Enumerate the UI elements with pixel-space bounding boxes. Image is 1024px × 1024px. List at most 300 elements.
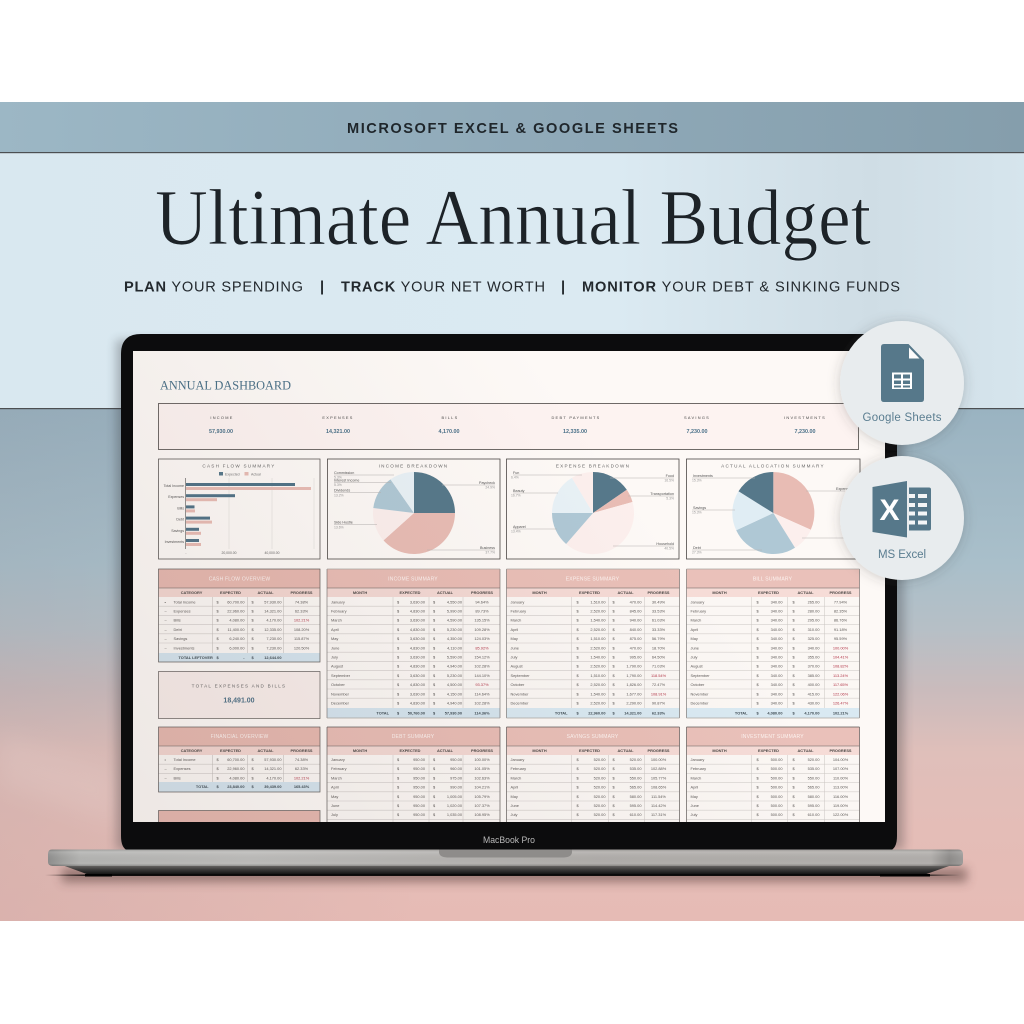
- table: financial overview: 165.43%: [294, 784, 310, 789]
- chart: income breakdown: [328, 459, 500, 559]
- table: investment summary: 110.00%: [833, 775, 849, 780]
- table: debt summary: May: [331, 794, 338, 799]
- table: bill summary: 340.00: [771, 636, 783, 641]
- table: debt summary: 108.95%: [474, 812, 490, 817]
- table: bill summary: February: [690, 608, 706, 614]
- table: investment summary: May: [690, 794, 698, 799]
- table: expense summary: 875.00: [630, 636, 642, 641]
- KPI strip: INVESTMENTS: [784, 415, 826, 420]
- table: debt summary: 950.00: [413, 757, 426, 762]
- table: bill summary: $: [756, 710, 760, 716]
- chart: expense breakdown: EXPENSE BREAKDOWN: [556, 464, 630, 468]
- table: cash flow overview: $: [216, 618, 220, 623]
- table: investment summary: 119.00%: [833, 803, 849, 808]
- pie labels: 27.3%: [692, 550, 702, 554]
- table: bill summary: 100.00%: [833, 645, 849, 650]
- table: investment summary: $: [792, 757, 796, 762]
- table: expense summary: $: [612, 691, 616, 696]
- table: expense summary: 64.50%: [652, 654, 666, 660]
- table: income summary: 4,830.00: [410, 682, 426, 687]
- table: cash flow overview: $: [252, 627, 254, 632]
- table: income summary: 4,830.00: [410, 627, 426, 632]
- table: savings summary: February: [510, 766, 526, 771]
- table: income summary: September: [331, 673, 351, 678]
- table: income summary: August: [331, 664, 344, 669]
- table: bill summary: 91.18%: [834, 627, 848, 632]
- pie labels: 37.7%: [485, 550, 495, 554]
- table: income summary: 4,830.00: [410, 645, 426, 650]
- subtitle divider 2: |: [561, 280, 565, 296]
- table: bill summary: 95.59%: [834, 636, 848, 641]
- table: bill summary: 108.82%: [833, 664, 849, 669]
- table: bill summary: $: [792, 664, 796, 669]
- KPI strip: 4,170.00: [439, 429, 459, 435]
- banner text: MICROSOFT EXCEL & GOOGLE SHEETS: [347, 121, 678, 137]
- table: expense summary: November: [510, 691, 529, 696]
- table: debt summary: $: [433, 812, 436, 817]
- table: investment summary: PROGRESS: [829, 748, 852, 753]
- table: debt summary: $: [433, 803, 436, 808]
- table: bill summary: EXPECTED: [758, 590, 779, 595]
- table: investment summary: 104.00%: [833, 757, 849, 762]
- table: expense summary: 1,510.00: [590, 636, 606, 641]
- pie labels: 5.3%: [334, 476, 342, 480]
- table: cash flow overview: 6,240.00: [229, 636, 245, 641]
- table: financial overview: 39,439.00: [264, 784, 282, 789]
- legend: [219, 472, 261, 476]
- table: bill summary: $: [756, 599, 760, 604]
- table: cash flow overview: •: [164, 599, 166, 604]
- table: bill summary: $: [792, 608, 796, 614]
- table: debt summary: 100.00%: [474, 757, 490, 762]
- table: debt summary: 105.79%: [474, 794, 490, 799]
- table: expense summary: $: [576, 673, 580, 678]
- table: financial overview: TOTAL: [196, 784, 209, 789]
- table: cash flow overview: $: [216, 599, 220, 604]
- table: savings summary: July: [510, 812, 517, 817]
- pie labels: 15.3%: [692, 510, 702, 514]
- table: income summary: 4,550.00: [447, 599, 463, 604]
- table: savings summary: 108.65%: [651, 785, 667, 790]
- table: expense summary: $: [576, 627, 580, 632]
- table: debt summary: 1,005.00: [447, 794, 463, 799]
- table: savings summary: 595.00: [630, 803, 642, 808]
- table: income summary: July: [331, 654, 338, 660]
- subtitle: track: TRACK YOUR NET WORTH: [341, 280, 545, 296]
- pie labels: [334, 471, 495, 554]
- table: bill summary: 77.94%: [834, 599, 848, 604]
- table: savings summary: 114.42%: [651, 803, 667, 808]
- table: cash flow overview: Expenses: [174, 608, 191, 614]
- table: investment summary: $: [792, 812, 796, 817]
- chart: expense breakdown: [506, 459, 679, 559]
- table: expense summary: TOTAL: [555, 710, 568, 716]
- table: savings summary: 550.00: [630, 775, 642, 780]
- table: financial overview: 14,321.00: [264, 766, 282, 771]
- KPI strip: 14,321.00: [326, 429, 350, 435]
- table: financial overview: $: [252, 757, 254, 762]
- table: cash flow overview: $: [216, 655, 220, 660]
- table: income summary: 114.36%: [474, 710, 490, 716]
- table: cash flow overview: ACTUAL: [258, 590, 274, 595]
- table: bill summary: 340.00: [771, 608, 783, 614]
- table: income summary: 4,110.00: [447, 645, 463, 650]
- table: income summary: 5,230.00: [447, 673, 463, 678]
- table: investment summary: $: [756, 803, 760, 808]
- pie labels: Side Hustle: [334, 520, 353, 524]
- table: income summary: PROGRESS: [471, 590, 493, 595]
- table: financial overview: Total Income: [174, 757, 196, 762]
- table: expense summary: February: [510, 608, 526, 614]
- table: investment summary: 500.00: [771, 803, 783, 808]
- pie labels: 15.3%: [692, 478, 702, 482]
- table: income summary: 4,940.00: [447, 664, 463, 669]
- table: expense summary: $: [576, 599, 580, 604]
- table: income summary: 93.37%: [475, 682, 489, 687]
- table: savings summary: 610.00: [630, 812, 642, 817]
- table: income summary: $: [397, 654, 400, 660]
- chart: cash flow summary: CASH FLOW SUMMARY: [202, 464, 276, 468]
- table: financial overview: 57,930.00: [264, 757, 282, 762]
- table: income summary: $: [433, 599, 436, 604]
- table: cash flow overview: $: [252, 618, 254, 623]
- table: income summary: 102.28%: [474, 664, 490, 669]
- table: debt summary: $: [397, 794, 400, 799]
- icon: excel: X: [879, 494, 900, 527]
- table: expense summary: 1,677.00: [626, 691, 642, 696]
- table: income summary: $: [397, 599, 400, 604]
- KPI strip: EXPENSES: [322, 415, 354, 420]
- card: total expenses and bills: 18,491.00: [223, 698, 255, 704]
- table: debt summary: $: [397, 766, 400, 771]
- table: income summary: 4,150.00: [447, 691, 463, 696]
- table: debt summary: January: [331, 757, 345, 762]
- table: financial overview: EXPECTED: [220, 748, 241, 753]
- table: cash flow overview: -: [243, 655, 245, 660]
- table: expense summary: 61.03%: [652, 618, 666, 623]
- table: bill summary: $: [756, 664, 760, 669]
- table: cash flow overview: 74.38%: [295, 599, 309, 604]
- table: expense summary: 14,321.00: [624, 710, 642, 716]
- table: investment summary: 565.00: [808, 785, 820, 790]
- table: investment summary: 595.00: [808, 803, 820, 808]
- table: debt summary: 1,020.00: [447, 803, 463, 808]
- title: Ultimate Annual Budget: [155, 175, 871, 262]
- table: bill summary: $: [756, 608, 760, 614]
- table: bill summary: 340.00: [771, 673, 783, 678]
- table: debt summary: 950.00: [413, 766, 426, 771]
- table: savings summary: $: [576, 757, 580, 762]
- table: expense summary: MONTH: [532, 590, 547, 595]
- table: bill summary: 4,080.00: [767, 710, 782, 716]
- table: investment summary: $: [792, 766, 796, 771]
- table: savings summary: $: [612, 785, 616, 790]
- table: bill summary: $: [792, 627, 796, 632]
- table: income summary: $: [397, 682, 400, 687]
- table: investment summary: July: [690, 812, 697, 817]
- table: bill summary: 86.76%: [834, 618, 848, 623]
- table: income summary: 4,350.00: [447, 636, 463, 641]
- table: expense summary: $: [576, 645, 580, 650]
- table: investment summary: $: [756, 766, 760, 771]
- table: savings summary: $: [576, 812, 580, 817]
- table: debt summary: 104.21%: [474, 785, 490, 790]
- table: expense summary: $: [576, 700, 580, 706]
- laptop screen: [133, 351, 885, 830]
- table: savings summary: $: [612, 794, 616, 799]
- trackpad notch: [439, 850, 572, 858]
- pie labels: 40.5%: [664, 546, 674, 550]
- table: cash flow overview: –: [164, 636, 168, 641]
- table: expense summary: EXPECTED: [579, 590, 600, 595]
- table: bill summary: April: [690, 627, 698, 632]
- light blue header area: [0, 153, 1024, 408]
- table: next panel header (cut off): [158, 810, 320, 822]
- table: income summary: 4,500.00: [447, 682, 463, 687]
- table: savings summary: PROGRESS: [647, 748, 670, 753]
- table: savings summary: $: [612, 757, 616, 762]
- table: income summary: 94.64%: [475, 599, 489, 604]
- table: cash flow overview: $: [216, 645, 220, 650]
- table: financial overview: 23,840.00: [227, 784, 244, 789]
- table: income summary: 3,630.00: [410, 599, 426, 604]
- table: income summary: 5,230.00: [447, 627, 463, 632]
- table: financial overview: $: [252, 766, 254, 771]
- table: expense summary: 33.33%: [652, 627, 666, 632]
- table: bill summary: October: [690, 682, 705, 687]
- table: investment summary: February: [690, 766, 706, 771]
- table: debt summary: EXPECTED: [400, 748, 421, 753]
- table: expense summary: $: [612, 700, 616, 706]
- table: income summary: December: [331, 700, 350, 706]
- table: expense summary: May: [510, 636, 518, 641]
- bar labels: Savings: [171, 529, 184, 533]
- table: bill summary: $: [792, 636, 796, 641]
- table: bill summary: 4,170.00: [804, 710, 820, 716]
- table: debt summary: 950.00: [413, 794, 426, 799]
- table: income summary: $: [397, 645, 400, 650]
- table: expense summary: March: [510, 618, 521, 623]
- table: income summary: $: [433, 618, 436, 623]
- table: bill summary: $: [792, 645, 796, 650]
- table: bill summary: 325.00: [808, 636, 820, 641]
- table: savings summary: ACTUAL: [618, 748, 634, 753]
- table: financial overview: $: [216, 775, 220, 780]
- table: investment summary: 580.00: [808, 794, 820, 799]
- table: bill summary: 415.00: [808, 691, 820, 696]
- table: savings summary: January: [510, 757, 524, 762]
- table: cash flow overview: 14,321.00: [264, 608, 282, 614]
- table: financial overview: $: [216, 784, 220, 789]
- table: savings summary: $: [576, 803, 580, 808]
- table: financial overview: [158, 727, 320, 792]
- table: debt summary: 101.05%: [474, 766, 490, 771]
- table: expense summary: [506, 569, 680, 718]
- table: expense summary: 2,290.00: [626, 700, 642, 706]
- table: debt summary: $: [397, 803, 400, 808]
- table: bill summary: June: [690, 645, 699, 650]
- table: expense summary: $: [612, 682, 616, 687]
- subtitle: monitor: MONITOR YOUR DEBT & SINKING FUNDS: [582, 280, 900, 296]
- table: financial overview: $: [252, 784, 254, 789]
- table: investment summary: 500.00: [771, 794, 783, 799]
- table: expense summary: $: [612, 608, 616, 614]
- pie labels: Expenses: [836, 487, 852, 491]
- table: cash flow overview: $: [252, 645, 254, 650]
- bar labels: Bills: [177, 506, 184, 510]
- table: financial overview: –: [164, 775, 168, 780]
- table: expense summary: 1,510.00: [590, 673, 606, 678]
- table: investment summary: $: [756, 812, 760, 817]
- macbook label: MacBook Pro: [483, 835, 535, 846]
- KPI strip: BILLS: [441, 415, 459, 420]
- pie labels: 13.2%: [334, 494, 344, 498]
- table: income summary: 3,630.00: [410, 673, 426, 678]
- table: investment summary: $: [792, 775, 796, 780]
- table: debt summary: $: [397, 785, 400, 790]
- table: cash flow overview: $: [252, 655, 254, 660]
- table: cash flow overview: Savings: [174, 636, 187, 641]
- table: cash flow overview: CATEGORY: [181, 590, 203, 595]
- top banner: [0, 102, 1024, 152]
- table: income summary: INCOME SUMMARY: [388, 576, 438, 582]
- table: savings summary: 520.00: [594, 794, 606, 799]
- subtitle: plan: PLAN YOUR SPENDING: [124, 280, 303, 296]
- table: savings summary: $: [612, 775, 616, 780]
- table: bill summary: November: [690, 691, 709, 696]
- table: expense summary: $: [612, 618, 616, 623]
- table: expense summary: $: [576, 682, 580, 687]
- table: savings summary: $: [576, 775, 580, 780]
- table: bill summary: PROGRESS: [829, 590, 852, 595]
- table: expense summary: 470.00: [630, 645, 642, 650]
- bar labels: Debt: [176, 518, 184, 522]
- table: income summary: $: [397, 627, 400, 632]
- table: expense summary: $: [576, 654, 580, 660]
- table: savings summary: March: [510, 775, 521, 780]
- table: cash flow overview: 115.87%: [294, 636, 310, 641]
- bar labels: Investments: [165, 540, 184, 544]
- table: bill summary: $: [756, 618, 760, 623]
- table: savings summary: [506, 727, 680, 827]
- table: bill summary: $: [792, 673, 796, 678]
- table: debt summary: MONTH: [353, 748, 367, 753]
- table: savings summary: 520.00: [594, 757, 606, 762]
- pie labels: Commission: [334, 471, 354, 475]
- table: bill summary: 340.00: [771, 691, 783, 696]
- table: income summary: 4,940.00: [447, 700, 463, 706]
- table: income summary: $: [433, 636, 436, 641]
- table: cash flow overview: 108.20%: [294, 627, 310, 632]
- table: financial overview: PROGRESS: [290, 748, 313, 753]
- table: debt summary: 975.00: [450, 775, 463, 780]
- table: bill summary: $: [756, 636, 760, 641]
- table: savings summary: 520.00: [594, 785, 606, 790]
- pie: [373, 472, 455, 554]
- table: income summary: MONTH: [353, 590, 367, 595]
- table: financial overview: 62.33%: [295, 766, 309, 771]
- legend: Expected: [225, 472, 240, 476]
- table: bill summary: 113.24%: [833, 673, 849, 678]
- table: savings summary: 100.00%: [651, 757, 667, 762]
- table: income summary: 50,760.00: [408, 710, 425, 716]
- table: cash flow overview: $: [252, 608, 254, 614]
- table: cash flow overview: Investments: [174, 645, 195, 650]
- table: cash flow overview: 6,000.00: [229, 645, 245, 650]
- table: investment summary: $: [756, 785, 760, 790]
- table: investment summary: January: [690, 757, 704, 762]
- table: expense summary: 940.00: [630, 618, 642, 623]
- table: investment summary: June: [690, 803, 699, 808]
- table: expense summary: 33.53%: [652, 608, 666, 614]
- table: savings summary: 520.00: [594, 775, 606, 780]
- table: financial overview: –: [164, 766, 168, 771]
- badge: MS Excel: [840, 456, 964, 580]
- axis labels: -: [185, 551, 187, 555]
- table: income summary: 57,930.00: [445, 710, 462, 716]
- label: MS Excel: [878, 549, 926, 561]
- table: cash flow overview: 102.21%: [294, 618, 310, 623]
- table: income summary: $: [433, 608, 436, 614]
- table: bill summary: December: [690, 700, 709, 706]
- table: expense summary: 1,826.00: [626, 682, 642, 687]
- table: income summary: $: [397, 700, 400, 706]
- table: bill summary: 340.00: [771, 664, 783, 669]
- table: bill summary: $: [792, 682, 796, 687]
- table: income summary: 3,630.00: [410, 654, 426, 660]
- table: income summary: 4,830.00: [410, 608, 426, 614]
- table: expense summary: December: [510, 700, 529, 706]
- table: expense summary: $: [612, 654, 616, 660]
- table: financial overview: $: [216, 757, 220, 762]
- table: bill summary: $: [756, 691, 760, 696]
- table: savings summary: 520.00: [630, 757, 642, 762]
- table: cash flow overview: 4,170.00: [266, 618, 282, 623]
- table: cash flow overview: $: [252, 599, 254, 604]
- pie labels: Investments: [693, 474, 713, 478]
- table: savings summary: 580.00: [630, 794, 642, 799]
- table: investment summary: $: [756, 775, 760, 780]
- table: debt summary: 102.63%: [474, 775, 490, 780]
- table: bill summary: $: [792, 691, 796, 696]
- pie labels: Fun: [513, 471, 519, 475]
- table: expense summary: 1,510.00: [590, 599, 606, 604]
- table: expense summary: 1,540.00: [590, 618, 606, 623]
- table: income summary: 85.92%: [475, 645, 489, 650]
- table: expense summary: $: [612, 599, 616, 604]
- pie labels: 13.6%: [334, 526, 344, 530]
- table: income summary: 3,630.00: [410, 691, 426, 696]
- pie labels: Transportation: [650, 492, 674, 496]
- table: debt summary: 950.00: [413, 812, 426, 817]
- table: expense summary: 118.54%: [651, 673, 667, 678]
- table: income summary: November: [331, 691, 350, 696]
- pie: [552, 472, 634, 554]
- table: income summary: $: [433, 627, 436, 632]
- table: savings summary: 117.31%: [651, 812, 667, 817]
- table: income summary: $: [433, 664, 436, 669]
- table: expense summary: 90.87%: [652, 700, 666, 706]
- table: bill summary: $: [756, 700, 760, 706]
- table: cash flow overview: Debt: [174, 627, 183, 632]
- table: income summary: 144.10%: [474, 673, 490, 678]
- lower gradient backdrop: [0, 152, 1024, 921]
- table: debt summary: $: [433, 766, 436, 771]
- table: debt summary: $: [397, 757, 400, 762]
- table: bill summary: 340.00: [771, 627, 783, 632]
- table: bill summary: 340.00: [771, 700, 783, 706]
- table: investment summary: $: [792, 794, 796, 799]
